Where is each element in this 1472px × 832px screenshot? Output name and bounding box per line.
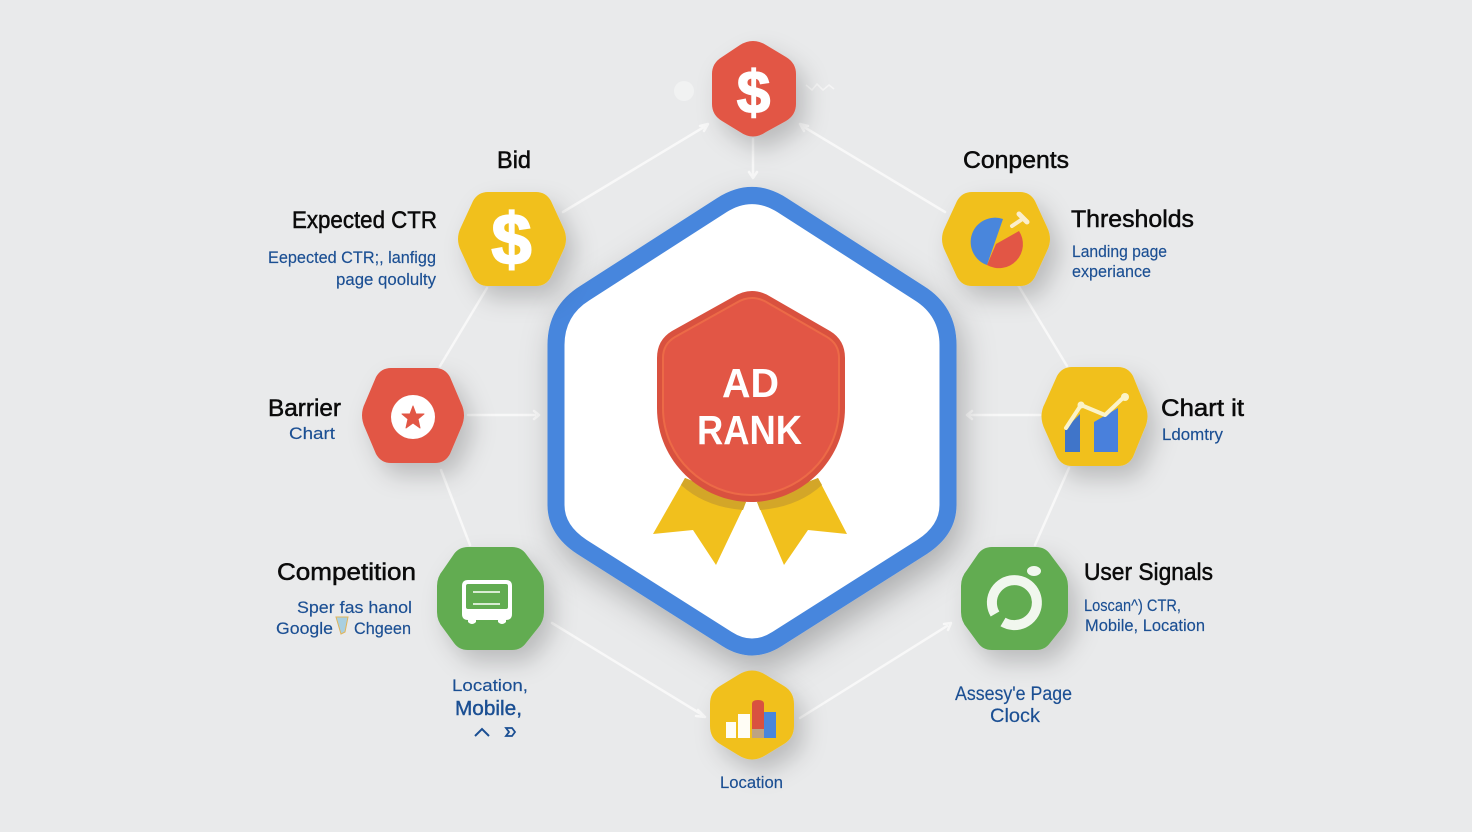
- competition text block: Competition: [277, 559, 416, 586]
- chart it text block: [1161, 395, 1244, 444]
- decoration: pale circle and squiggle: [674, 81, 834, 101]
- user signals text block: User Signals: [1084, 559, 1213, 586]
- node: competition green monitor: [437, 547, 544, 650]
- competition text block: Chgeen: [354, 619, 411, 638]
- components heading: Conpents: [963, 147, 1069, 174]
- node: bid yellow dollar: $: [491, 200, 532, 280]
- location mobile text block: [452, 676, 528, 736]
- node: thresholds yellow pie chart: [942, 192, 1050, 286]
- location label: Location: [720, 773, 783, 792]
- node: chart yellow bars and trend: [1042, 367, 1148, 466]
- bid heading: Bid: [497, 147, 531, 174]
- node: bottom yellow bar chart: [710, 670, 794, 760]
- user signals text block: Loscan^) CTR,: [1084, 596, 1181, 615]
- expected ctr text block: page qoolulty: [336, 270, 436, 289]
- node: bid yellow dollar: [458, 192, 566, 286]
- competition text block: [276, 559, 416, 638]
- thresholds text block: Landing page: [1072, 242, 1167, 261]
- badge title: AD: [722, 360, 779, 406]
- assess page text block: Assesy'e Page: [955, 684, 1072, 705]
- user signals text block: [1084, 559, 1213, 635]
- node: top red dollar: [712, 41, 796, 136]
- barrier text block: [268, 395, 341, 443]
- assess page text block: [955, 684, 1072, 727]
- user signals text block: Mobile, Location: [1085, 616, 1205, 635]
- badge shield: [657, 291, 845, 502]
- icon: small pin glyph: [336, 617, 348, 634]
- chart it text block: Chart it: [1161, 395, 1244, 422]
- location mobile text block: Location,: [452, 676, 528, 695]
- ad rank badge: [653, 291, 847, 565]
- expected ctr text block: Expected CTR: [292, 207, 437, 234]
- location mobile text block: Mobile,: [455, 698, 522, 720]
- thresholds text block: Thresholds: [1071, 206, 1194, 233]
- chart it text block: Ldomtry: [1162, 425, 1223, 444]
- thresholds text block: experiance: [1072, 262, 1151, 281]
- expected ctr text block: Eepected CTR;, lanfigg: [268, 248, 436, 267]
- competition text block: Google: [276, 619, 333, 638]
- badge ribbons: [653, 478, 847, 565]
- thresholds text block: [1071, 206, 1194, 281]
- node: barrier red star: [362, 368, 464, 463]
- node: user signals green ring: [961, 547, 1068, 650]
- assess page text block: Clock: [990, 706, 1041, 727]
- barrier text block: Chart: [289, 424, 335, 443]
- node: top red dollar: $: [737, 59, 770, 126]
- competition text block: Sper fas hanol: [297, 598, 412, 617]
- barrier text block: Barrier: [268, 395, 341, 422]
- central hexagon panel: [556, 196, 948, 647]
- expected ctr text block: [268, 207, 437, 289]
- connector arrows and lines: [440, 124, 1069, 718]
- ad rank badge: RANK: [697, 407, 802, 453]
